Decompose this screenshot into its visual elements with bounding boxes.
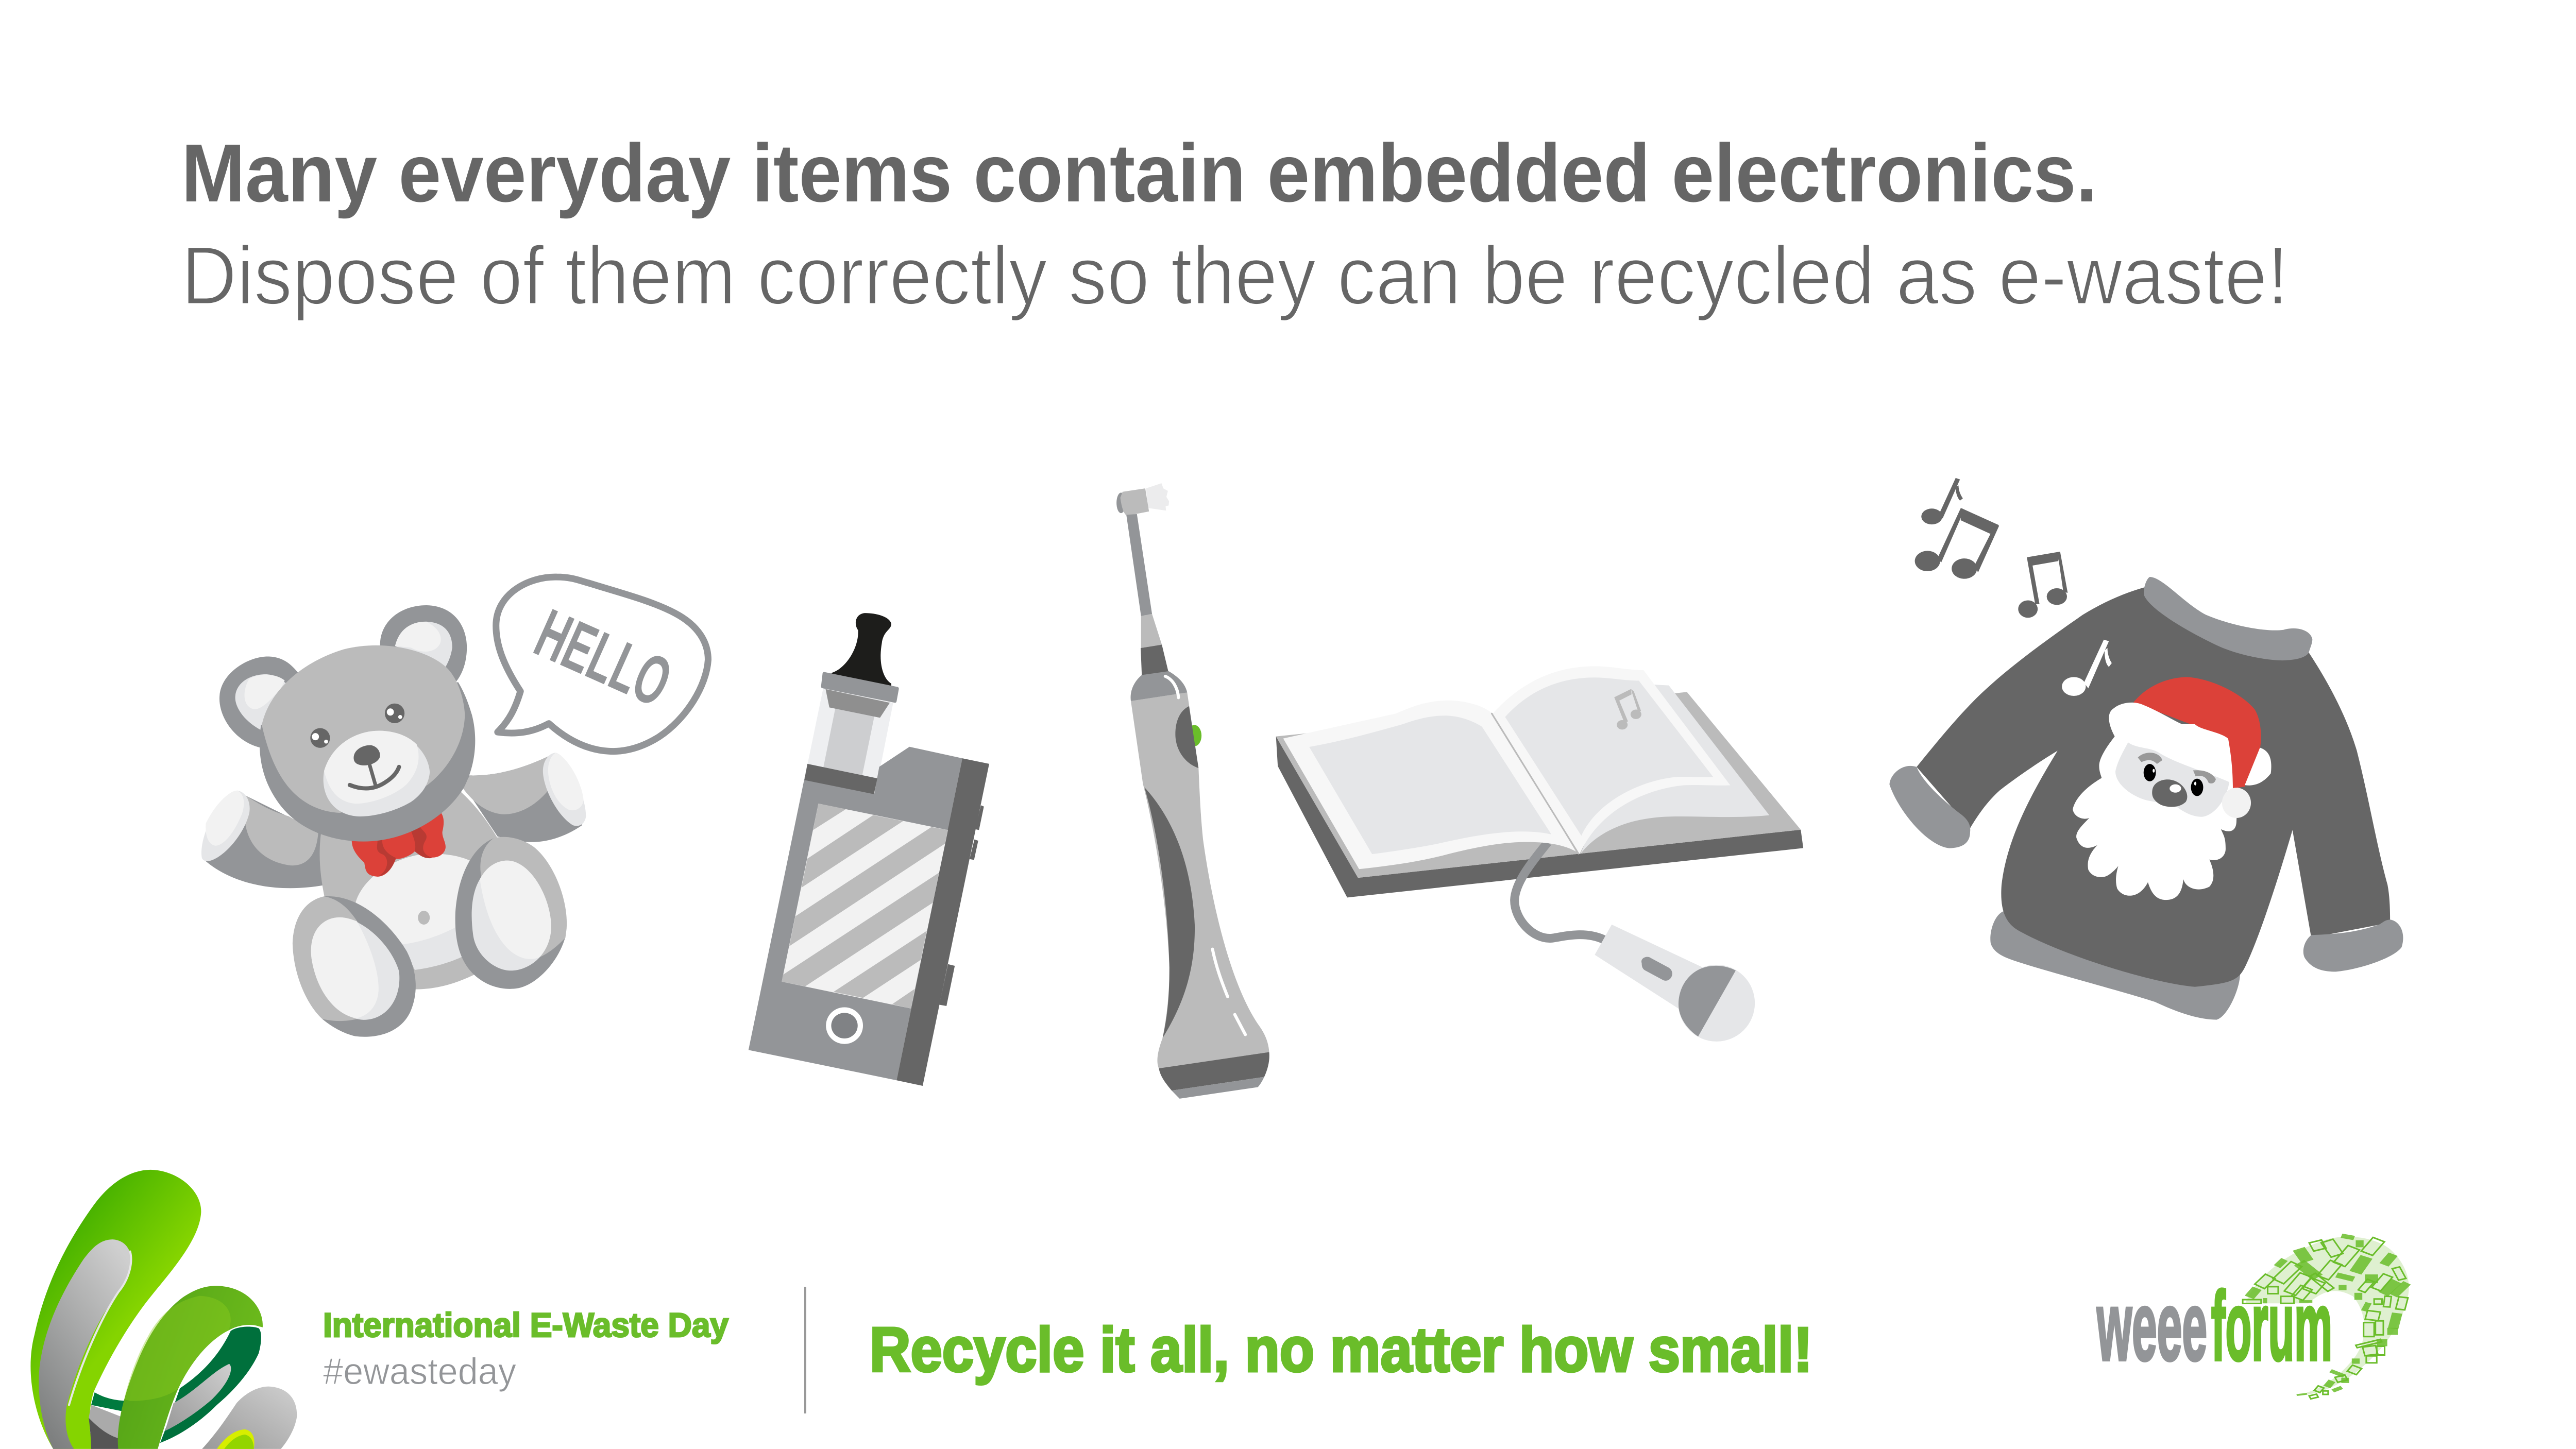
- brush head: [1116, 488, 1149, 516]
- sweater collar: [2144, 577, 2312, 660]
- power button with green light: [1175, 706, 1201, 768]
- illustration: vape device: [749, 613, 989, 1086]
- microphone: [1595, 925, 1755, 1042]
- microphone cord: [1515, 842, 1604, 940]
- ear: left: [219, 656, 300, 748]
- logo: weeeforum: forum: [2211, 1272, 2332, 1381]
- tagline: Recycle it all, no matter how small!: [870, 1315, 1812, 1385]
- spine: [1492, 713, 1579, 854]
- sweater body: [1917, 586, 2390, 987]
- illustration: teddy bear with speech bubble: [201, 577, 708, 1037]
- music note on page: [1614, 689, 1641, 729]
- left cuff: [1890, 766, 1970, 848]
- drip tip: [831, 613, 891, 690]
- bristles: [1146, 483, 1169, 510]
- vape tank: [807, 688, 893, 779]
- santa: [2073, 677, 2271, 900]
- left page: [1283, 701, 1576, 869]
- illustration: christmas sweater with music notes: [1890, 478, 2403, 1020]
- footer label: event name: International E-Waste Day: [323, 1306, 728, 1344]
- highlights: [1212, 949, 1245, 1035]
- arm: left: [201, 791, 324, 888]
- illustration: electric toothbrush: [1116, 483, 1269, 1099]
- grip: [1144, 787, 1195, 1038]
- device body: [749, 747, 962, 1080]
- right cuff: [2303, 919, 2403, 971]
- music note: double: [1915, 508, 1999, 579]
- illustration: musical book with microphone: [1276, 666, 1803, 1042]
- title: [181, 127, 2289, 321]
- sweater hem: [1990, 911, 2240, 1020]
- bow tie: [352, 812, 446, 877]
- book cover: [1276, 692, 1803, 897]
- device side with buttons: [896, 758, 989, 1086]
- ear: right: [380, 605, 467, 684]
- music note: single: [1921, 478, 1963, 524]
- speech bubble text: HELLO: [524, 594, 682, 721]
- speech bubble: [496, 577, 708, 752]
- arm: right: [458, 753, 586, 842]
- dark band: [804, 764, 877, 794]
- subheadline: Dispose of them correctly so they can be recycled as e-waste!: [181, 229, 2289, 321]
- foot: left: [293, 896, 416, 1037]
- right page: [1493, 666, 1769, 854]
- logo: weeeforum: weee: [2097, 1272, 2207, 1381]
- divider: [804, 1287, 806, 1413]
- screen with stripes: [782, 804, 948, 1009]
- music note: third: [2018, 552, 2067, 618]
- home button: [826, 1007, 863, 1044]
- logo: weeeforum: [2097, 1234, 2411, 1399]
- body: [320, 791, 498, 990]
- foot: right: [455, 837, 567, 989]
- collar: [823, 674, 897, 718]
- logo swirl of device icons: [2243, 1234, 2411, 1399]
- headline: Many everyday items contain embedded electronics.: [181, 127, 2097, 219]
- handle: [1131, 692, 1269, 1068]
- base: [1159, 1052, 1269, 1099]
- white music note: [2062, 640, 2112, 696]
- brush neck: [1126, 514, 1168, 676]
- logo: International E-Waste Day swirl: [30, 1170, 297, 1449]
- head: [260, 645, 475, 842]
- top cap: [1131, 671, 1187, 701]
- footer label: hashtag: #ewasteday: [323, 1351, 516, 1392]
